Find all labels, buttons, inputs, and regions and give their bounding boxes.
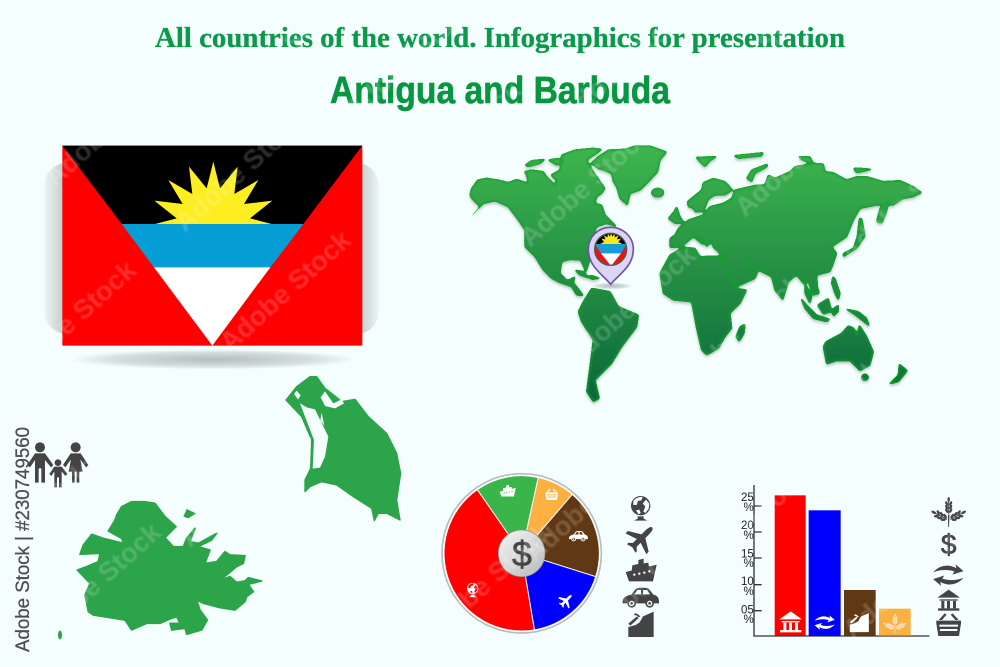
text: Adobe Stock [214, 224, 357, 357]
map: Australia [823, 325, 873, 371]
legend icon: ship [626, 559, 657, 581]
heading: country name: Antigua and Barbuda [330, 70, 671, 112]
pie icon: basket [545, 489, 558, 500]
stock credit: Adobe Stock | #230749560 [13, 427, 34, 652]
world map [470, 146, 922, 402]
text: Adobe Stock [834, 134, 977, 267]
islet: Great Bird [183, 509, 196, 518]
axis label 05%: 05 [741, 604, 754, 616]
bar chart axis labels [741, 492, 754, 626]
pie icon: ship [500, 485, 516, 497]
axis label 15%: % [744, 558, 754, 570]
icon: child [49, 459, 67, 487]
text: Adobe Stock [837, 511, 980, 644]
pie icon: car [569, 531, 588, 541]
text: Adobe Stock [559, 239, 702, 372]
map: Greenland [591, 146, 667, 205]
flag red field [62, 146, 362, 346]
axis label 10%: 10 [741, 576, 754, 588]
flag white triangle [154, 267, 270, 346]
flag shadow backing [44, 163, 379, 334]
pie outer ring [442, 474, 601, 633]
text: Adobe Stock [39, 59, 182, 192]
pie icon: globe [467, 583, 478, 597]
bar icon: arrows [815, 615, 835, 630]
legend icon: plane [621, 517, 663, 559]
flag black band [62, 146, 362, 224]
bar: red [775, 495, 806, 636]
title: series heading: All countries of the world. Infographics for presentation [155, 22, 845, 54]
text: Adobe Stock [554, 0, 697, 129]
map: northern islands [734, 153, 872, 182]
Barbuda lagoon [294, 391, 344, 469]
text: Adobe Stock [514, 119, 657, 252]
flag rising sun [154, 162, 272, 224]
islet: Redonda [58, 630, 62, 640]
axis label 10%: % [744, 586, 754, 598]
flag floor shadow [70, 349, 357, 369]
map: Caribbean islands [575, 270, 600, 279]
map: Southeast Asia islands [801, 277, 840, 322]
bar chart axes [754, 485, 929, 636]
text: Adobe Stock [384, 74, 527, 207]
map: Scandinavia [687, 178, 733, 212]
island: Barbuda [286, 377, 401, 521]
pin shadow [591, 283, 632, 289]
legend icon: arrows [933, 564, 964, 586]
text: Adobe Stock [834, 271, 977, 404]
text: Adobe Stock [169, 104, 312, 237]
text: Adobe Stock [44, 374, 187, 507]
map: Iceland [652, 188, 664, 197]
text: Adobe Stock [519, 434, 662, 567]
panel: island maps [58, 377, 401, 640]
legend icon: wheat [929, 497, 968, 527]
bar: orange [879, 609, 911, 636]
panel: economy pie chart [442, 474, 601, 633]
pie hub [498, 530, 545, 577]
axis label 25%: 25 [741, 492, 754, 504]
text: Adobe Stock [574, 516, 717, 649]
bar icon: bank [779, 611, 802, 632]
hub dollar sign: $ [512, 535, 532, 574]
map: South America [578, 288, 638, 402]
map: Japan and Sakhalin [843, 218, 865, 257]
map: Eurasia [670, 163, 922, 300]
axis label 20%: % [744, 530, 754, 542]
text: Adobe Stock [666, 268, 809, 401]
axis label 20%: 20 [741, 520, 754, 532]
map: New Zealand [889, 364, 907, 384]
icon: mother [63, 442, 88, 483]
bar icon: mine [850, 613, 869, 632]
legend icon: mine [628, 612, 654, 637]
panel: national flag [44, 146, 379, 369]
pie segment: green ship [477, 476, 538, 553]
map: Africa [660, 247, 747, 355]
text: Adobe Stock [24, 516, 167, 649]
pie segment: orange basket [522, 477, 572, 553]
flag blue band [122, 224, 303, 267]
bar legend icons [929, 497, 968, 636]
pie segment: brown car [522, 494, 599, 577]
pie icon: plane [556, 590, 577, 611]
panel: bar chart [754, 485, 929, 636]
pie segment: blue plane [522, 553, 596, 630]
text: Adobe Stock [174, 419, 317, 552]
bar: blue [809, 510, 841, 636]
axis label 25%: % [744, 502, 754, 514]
text: Adobe Stock [229, 516, 372, 649]
pin badge ring [595, 233, 627, 265]
Antigua land [77, 502, 262, 634]
map: British Isles [668, 207, 684, 223]
legend dollar sign: $ [941, 529, 957, 560]
map: Madagascar [736, 324, 745, 342]
map: Svalbard [696, 157, 717, 167]
map: Tasmania [862, 374, 868, 381]
bar: brown [844, 590, 876, 636]
text: Adobe Stock [414, 516, 557, 649]
map: New Guinea [846, 309, 869, 326]
pin body [588, 227, 633, 284]
map location pin [588, 227, 633, 289]
text: Adobe Stock [0, 254, 142, 387]
pie legend icons [621, 496, 663, 637]
text: Adobe Stock [344, 269, 487, 402]
text: Adobe Stock [729, 89, 872, 222]
text: Adobe Stock [734, 404, 877, 537]
legend icon: car [623, 588, 659, 608]
island: Antigua [77, 502, 262, 634]
icon: family [27, 442, 88, 487]
legend icon: globe [631, 496, 650, 521]
axis label 15%: 15 [741, 548, 754, 560]
map: Kamchatka gulf island [877, 202, 888, 223]
map: Arctic islands [525, 158, 563, 167]
pie segment: red tourism [444, 490, 534, 631]
icon: father [27, 442, 53, 483]
text: Adobe Stock [389, 389, 532, 522]
bar icon: wheat [882, 614, 908, 634]
axis label 05%: % [744, 614, 754, 626]
Barbuda land [286, 377, 401, 521]
pin flag badge [595, 234, 626, 265]
map: North America [470, 148, 617, 296]
legend icon: basket [936, 613, 961, 636]
legend icon: bank [937, 590, 960, 611]
